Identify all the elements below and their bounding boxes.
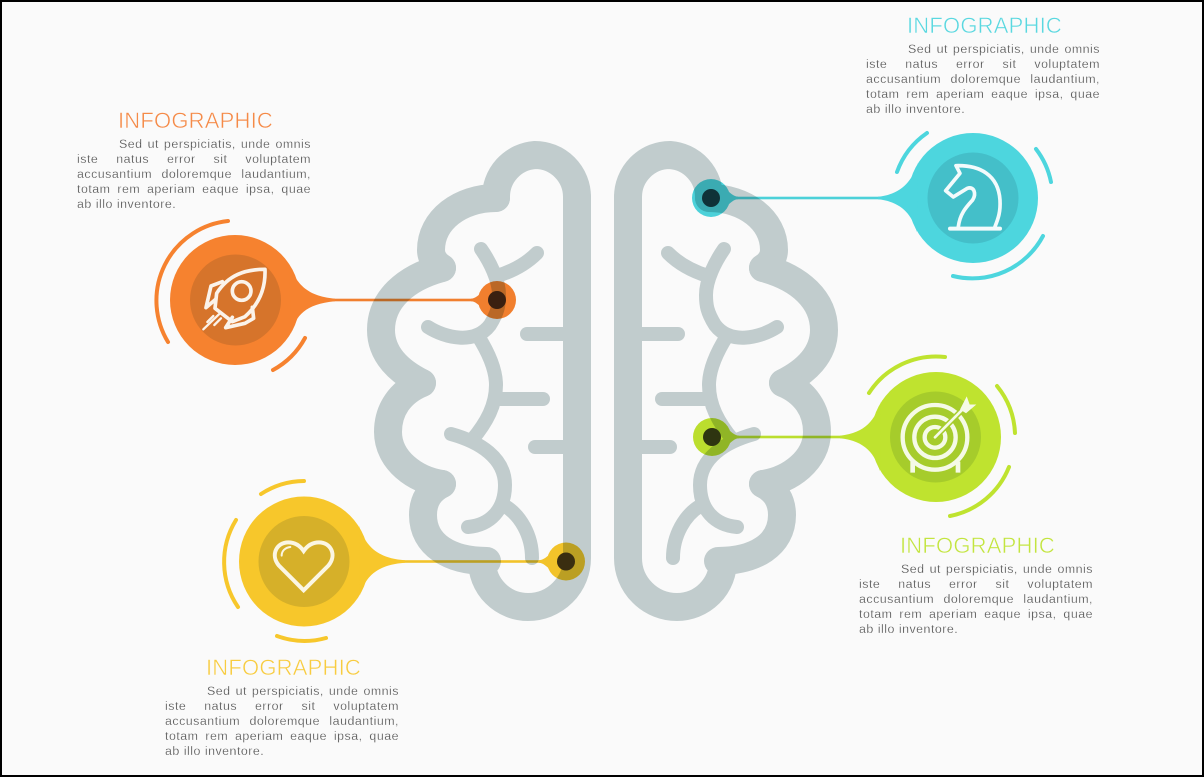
body text: lime — [859, 562, 1093, 636]
body text: orange: Sed ut perspiciatis, unde omnis — [119, 137, 311, 151]
connector: lime line to brain — [693, 418, 845, 456]
body text: orange: accusantium doloremque laudantium, — [77, 167, 311, 181]
lime inner circle — [890, 392, 981, 482]
text block: lime — [859, 533, 1093, 636]
orange arcs — [156, 221, 305, 370]
body text: yellow: accusantium doloremque laudantium, — [165, 714, 399, 728]
body text: yellow: Sed ut perspiciatis, unde omnis — [207, 684, 399, 698]
yellow arcs — [224, 481, 326, 641]
body text: orange: iste natus error sit voluptatem — [77, 152, 311, 166]
body text: teal: ab illo inventore. — [866, 102, 965, 116]
heading: orange: INFOGRAPHIC — [118, 108, 273, 133]
body text: teal: totam rem aperiam eaque ipsa, quae — [866, 87, 1100, 101]
body text: teal: iste natus error sit voluptatem — [866, 57, 1100, 71]
body text: teal — [866, 42, 1100, 116]
text block: teal — [866, 13, 1100, 116]
panel: orange rocket badge — [156, 221, 516, 370]
connector: orange line to brain — [330, 281, 516, 319]
yellow inner circle — [258, 516, 350, 607]
panel: lime target badge — [693, 357, 1015, 516]
heading: lime: INFOGRAPHIC — [900, 533, 1055, 558]
lime arcs — [869, 357, 1015, 516]
node dot: yellow — [557, 552, 575, 570]
icon: chess knight — [946, 166, 1000, 229]
node dot: teal — [702, 189, 720, 207]
body text: lime: iste natus error sit voluptatem — [859, 577, 1093, 591]
body text: yellow: ab illo inventore. — [165, 744, 264, 758]
text block: orange — [77, 108, 311, 211]
heading: teal: INFOGRAPHIC — [907, 13, 1062, 38]
teal arcs — [897, 133, 1051, 278]
body text: orange — [77, 137, 311, 211]
panel: teal knight badge — [692, 133, 1051, 278]
body text: lime: Sed ut perspiciatis, unde omnis — [901, 562, 1093, 576]
text block: yellow — [165, 655, 399, 758]
body text: orange: ab illo inventore. — [77, 197, 176, 211]
body text: lime: ab illo inventore. — [859, 622, 958, 636]
body text: orange: totam rem aperiam eaque ipsa, quae — [77, 182, 311, 196]
body text: yellow: totam rem aperiam eaque ipsa, quae — [165, 729, 399, 743]
brain: right hemisphere — [628, 155, 824, 607]
icon: target with arrow — [903, 398, 975, 473]
orange circle with tail — [170, 235, 335, 365]
icon: rocket — [203, 269, 265, 329]
panel: yellow heart badge — [224, 481, 585, 641]
body text: teal: Sed ut perspiciatis, unde omnis — [908, 42, 1100, 56]
teal inner circle — [928, 152, 1018, 244]
node dot: lime — [703, 428, 721, 446]
body text: yellow: iste natus error sit voluptatem — [165, 699, 399, 713]
heading: yellow: INFOGRAPHIC — [206, 655, 361, 680]
body text: lime: totam rem aperiam eaque ipsa, quae — [859, 607, 1093, 621]
body text: yellow — [165, 684, 399, 758]
body text: teal: accusantium doloremque laudantium, — [866, 72, 1100, 86]
brain: left hemisphere — [381, 155, 577, 607]
orange inner circle — [190, 254, 281, 346]
connector: teal line to brain — [692, 179, 885, 217]
teal circle with tail — [878, 133, 1038, 263]
lime circle with tail — [840, 372, 1001, 502]
body text: lime: accusantium doloremque laudantium, — [859, 592, 1093, 606]
yellow circle with tail — [239, 496, 405, 626]
node dot: orange — [488, 291, 506, 309]
connector: yellow line to brain — [400, 542, 585, 580]
icon: heart — [275, 542, 332, 590]
